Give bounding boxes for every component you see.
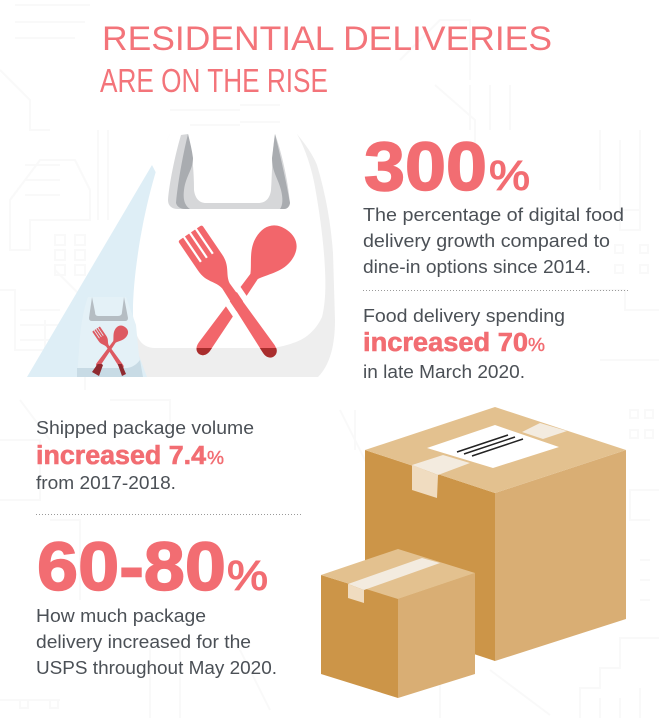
text: digital food delivery growth: dine-in options since 2014. [363,256,591,277]
icon: shopping bag with cutlery [27,134,335,377]
stat: food delivery spending: increased 70 [363,329,528,357]
stat: shipped package volume [36,417,254,493]
title: RESIDENTIAL DELIVERIES [102,20,552,58]
stat: shipped package volume: increased 7.4 [36,442,207,470]
magnifying light beam [27,165,170,377]
stat: 60-80%: 60-80 [37,528,226,605]
bag body [133,134,335,377]
spoon [196,225,297,356]
stat: food delivery spending: % [528,335,545,355]
stat: shipped package volume: Shipped package volume [36,417,254,438]
stat: shipped package volume: % [207,448,224,468]
stat: 60-80%: % [227,552,268,599]
text: USPS package delivery [36,605,277,678]
stat: 300%: 300 [364,128,487,205]
stat: 300%: % [489,152,530,199]
fork [178,226,277,358]
text: digital food delivery growth: delivery growth compared to [363,230,610,251]
stat: 300% [364,128,530,205]
stat: shipped package volume: from 2017-2018. [36,472,176,493]
text: digital food delivery growth [363,204,624,277]
title [100,20,552,99]
text: USPS package delivery: How much package [36,605,206,626]
stat: food delivery spending: in late March 2020. [363,361,525,382]
stat: food delivery spending: Food delivery spending [363,305,565,326]
small bag in beam [77,297,143,377]
text: USPS package delivery: delivery increased for the [36,631,251,652]
icon: small cardboard box [321,549,475,698]
text: digital food delivery growth: The percentage of digital food [363,204,624,225]
title: ARE ON THE RISE [100,62,328,99]
icon: large cardboard box [365,407,626,661]
text: USPS package delivery: USPS throughout May 2020. [36,657,277,678]
stat: food delivery spending [363,305,565,382]
